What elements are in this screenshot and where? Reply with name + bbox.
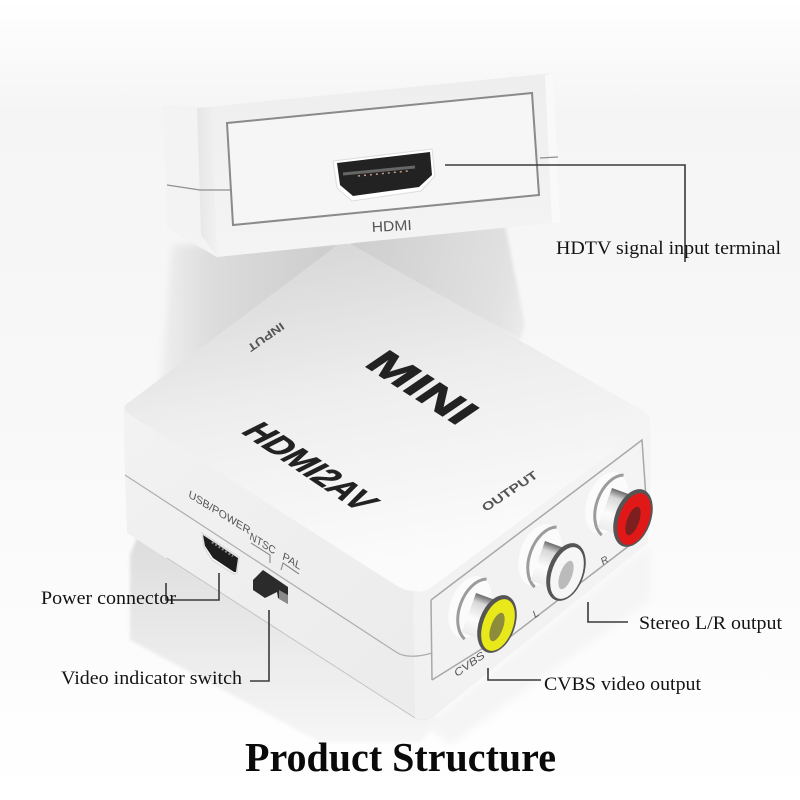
yellow RCA connector bbox=[440, 570, 524, 658]
leader: CVBS output bbox=[488, 668, 541, 680]
left side face bbox=[124, 408, 440, 720]
INPUT label: INPUT bbox=[245, 320, 286, 354]
red RCA connector bbox=[577, 466, 660, 552]
port label CVBS: CVBS bbox=[452, 650, 487, 679]
label: CVBS output: CVBS video output bbox=[544, 675, 702, 695]
label: HDTV signal input terminal: HDTV signal input terminal bbox=[556, 239, 781, 259]
mini USB port bbox=[202, 533, 239, 574]
leader: video switch bbox=[250, 610, 269, 681]
leader: stereo output bbox=[588, 602, 628, 622]
reflection under main device bbox=[130, 530, 650, 745]
main converter device bbox=[124, 244, 660, 720]
HDMI2AV logo: HDMI2AV bbox=[232, 418, 387, 516]
label: video indicator switch: Video indicator switch bbox=[61, 669, 242, 689]
white RCA connector bbox=[510, 518, 593, 606]
upper device: HDMI input side bbox=[163, 73, 560, 257]
video standard slide switch bbox=[253, 570, 288, 604]
upper device front bbox=[197, 73, 560, 257]
bottom edge line bbox=[167, 558, 415, 718]
label: stereo output: Stereo L/R output bbox=[639, 614, 783, 634]
port label R: R bbox=[599, 554, 611, 568]
leader: HDTV input bbox=[445, 165, 685, 262]
switch brackets bbox=[251, 543, 299, 574]
HDMI port frame bbox=[227, 93, 539, 225]
upper device corner highlight bbox=[197, 107, 217, 257]
output port frame bbox=[431, 440, 648, 680]
top face bbox=[124, 244, 650, 591]
HDMI caption: HDMI bbox=[371, 218, 412, 236]
leader: power connector bbox=[166, 573, 219, 600]
upper device side bbox=[163, 105, 217, 257]
OUTPUT label: OUTPUT bbox=[479, 468, 542, 514]
upper device right edge bbox=[545, 73, 560, 223]
shadow behind main device bbox=[160, 225, 525, 395]
USB power label: USB/POWER bbox=[187, 489, 252, 538]
PAL label: PAL bbox=[281, 551, 302, 573]
label: power connector: Power connector bbox=[41, 589, 176, 609]
seams bbox=[167, 157, 558, 190]
MINI logo: MINI bbox=[355, 344, 489, 431]
HDMI port bbox=[333, 149, 435, 201]
right side face bbox=[413, 420, 651, 719]
title: Product Structure bbox=[245, 734, 556, 780]
NTSC label: NTSC bbox=[248, 531, 277, 558]
port label L: L bbox=[531, 608, 541, 621]
case seam bbox=[125, 475, 432, 656]
